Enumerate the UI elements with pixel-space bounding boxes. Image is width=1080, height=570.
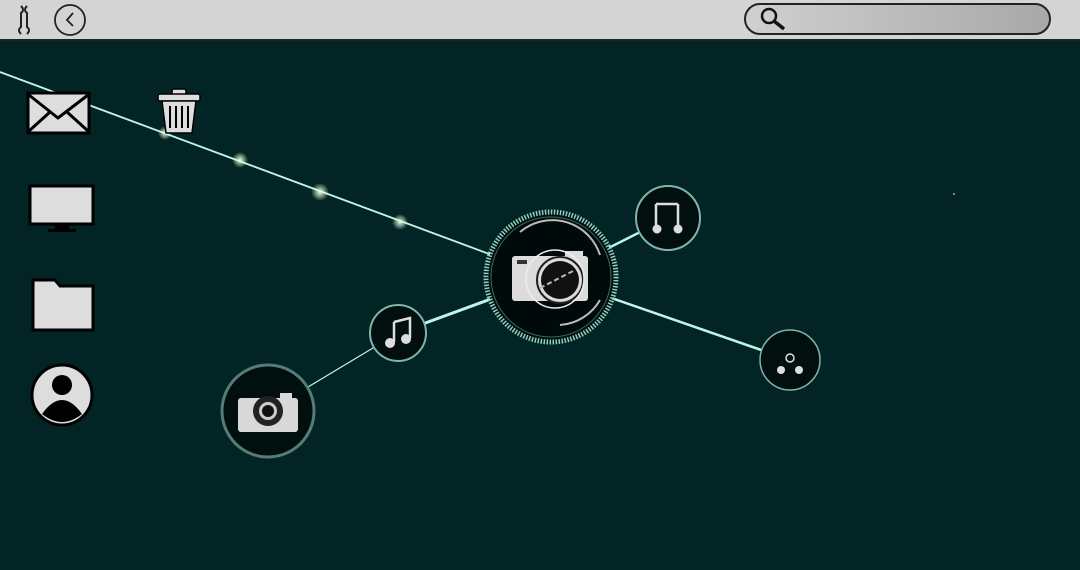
star dot [953,193,955,195]
icon: mail [28,93,89,133]
icon: wrench [19,6,29,34]
icon: clock [55,5,85,35]
icon: folder [33,280,93,330]
node: right dots [760,330,820,390]
node: main camera [486,212,616,342]
node: camera left [222,365,314,457]
top bar [0,0,1080,41]
icon: trash [158,89,200,133]
connection lines [0,72,790,411]
node: music top [636,186,700,250]
icon: user [32,365,92,425]
search box [745,4,1050,34]
node: music left [370,305,426,361]
icon: monitor [30,186,93,232]
